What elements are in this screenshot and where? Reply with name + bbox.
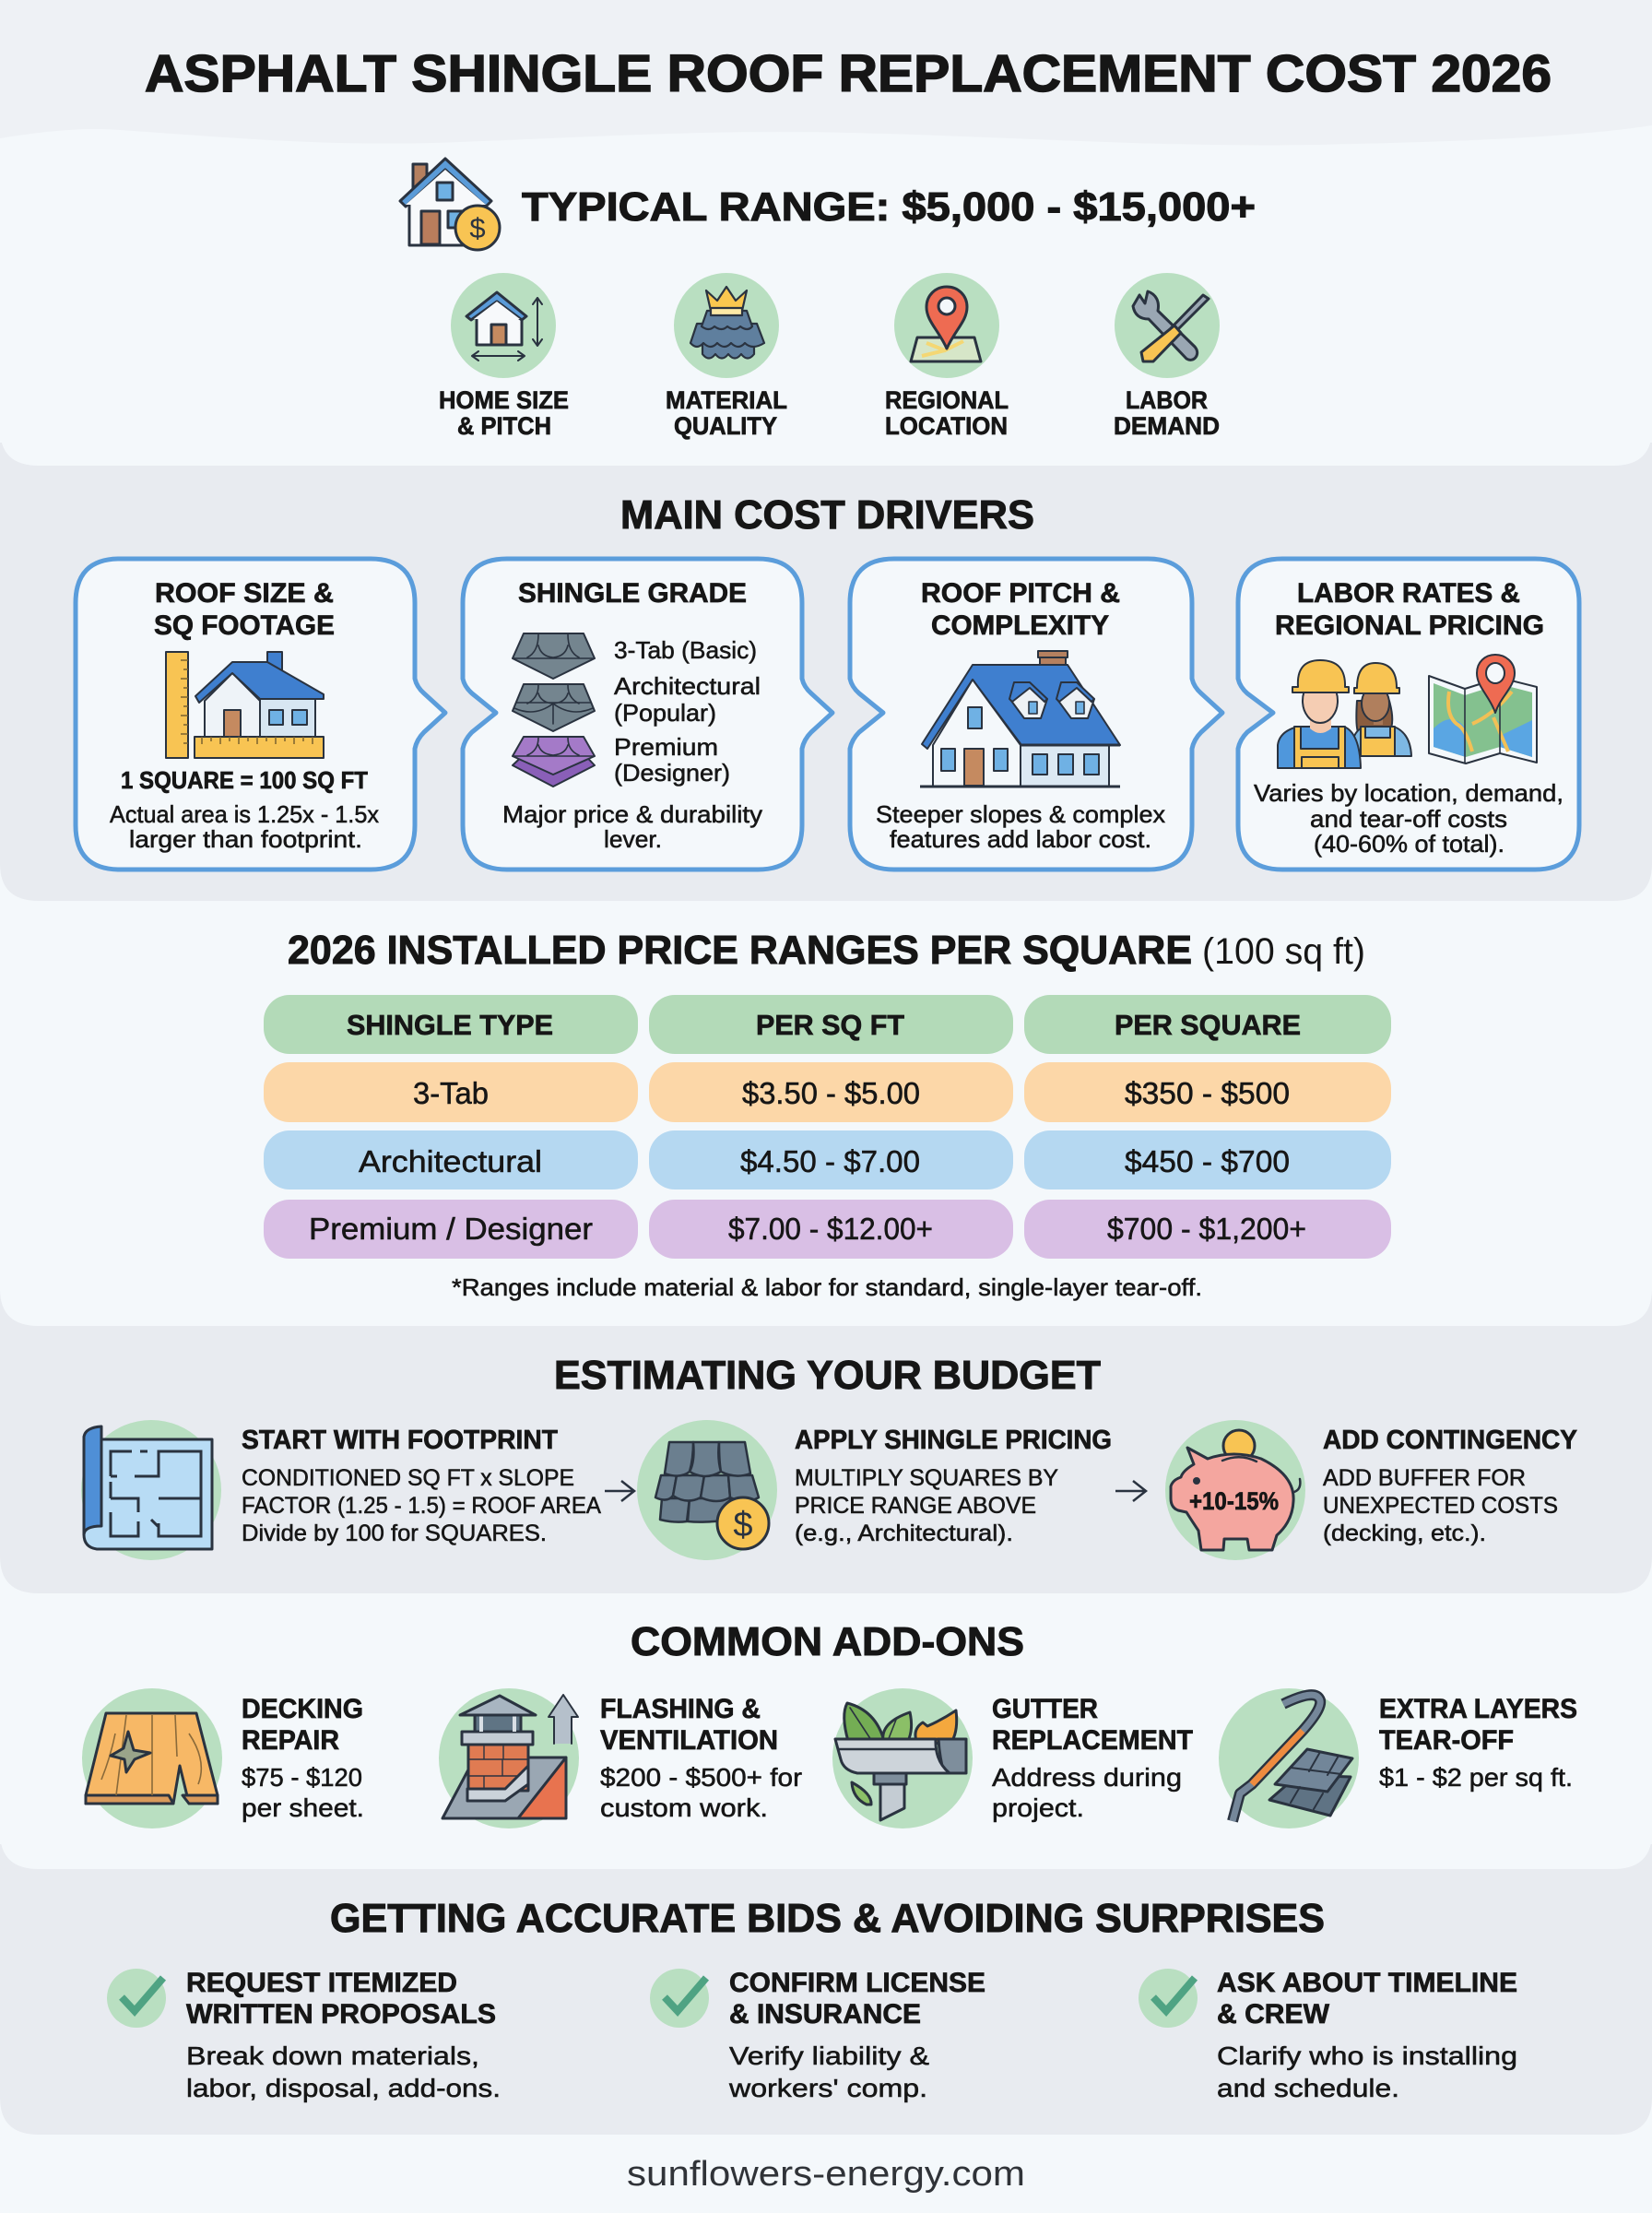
icon: blueprint	[81, 1420, 221, 1560]
factor: material quality	[666, 273, 787, 440]
description: lever.	[604, 825, 662, 853]
step: apply shingle pricing	[637, 1420, 1112, 1560]
step text: (e.g., Architectural).	[795, 1521, 1013, 1546]
icon: check	[107, 1969, 166, 2028]
label: QUALITY	[674, 412, 777, 440]
add-on text: REPLACEMENT	[992, 1725, 1193, 1756]
icon: workers	[1278, 660, 1411, 768]
icon: map pin	[911, 287, 981, 361]
description: larger than footprint.	[129, 825, 362, 853]
icon: piggy bank: +10-15%	[1189, 1487, 1279, 1515]
label: LOCATION	[885, 412, 1008, 440]
typical range text: TYPICAL RANGE: $5,000 - $15,000+	[522, 184, 1256, 230]
add-on text: $75 - $120	[242, 1763, 362, 1792]
heading: common add-ons: COMMON ADD-ONS	[631, 1619, 1024, 1664]
step text	[1323, 1426, 1577, 1546]
label	[885, 386, 1009, 440]
add-on text: $200 - $500+ for	[600, 1763, 802, 1792]
step text: CONDITIONED SQ FT x SLOPE	[242, 1465, 574, 1491]
add-on text	[992, 1694, 1193, 1822]
add-on text: project.	[992, 1793, 1084, 1822]
label	[1114, 386, 1220, 440]
add-on text: FLASHING &	[600, 1694, 761, 1724]
row: Architectural: $450 - $700	[1125, 1144, 1290, 1178]
tip text: ASK ABOUT TIMELINE	[1217, 1968, 1517, 1998]
icon: shingles with coin	[637, 1420, 777, 1560]
description	[1254, 779, 1564, 858]
add-on text: REPAIR	[242, 1725, 339, 1756]
tip text: Verify liability &	[729, 2041, 929, 2070]
grade labels	[614, 636, 761, 787]
step text	[795, 1426, 1112, 1546]
table footnote: *Ranges include material & labor for standard, single-layer tear-off.	[452, 1273, 1202, 1301]
icon: gutter with leaves	[832, 1688, 973, 1828]
add-on text	[242, 1694, 364, 1822]
icon: chimney flashing	[439, 1688, 579, 1828]
grade labels: (Designer)	[614, 759, 730, 787]
row: 3-Tab: $3.50 - $5.00	[742, 1076, 920, 1110]
tip: timeline and crew	[1139, 1968, 1517, 2102]
heading: installed price ranges: (100 sq ft)	[1202, 931, 1365, 972]
footer website: sunflowers-energy.com	[627, 2155, 1025, 2194]
step text: MULTIPLY SQUARES BY	[795, 1465, 1058, 1491]
icon: wrench and screwdriver	[1133, 291, 1209, 361]
step text: ADD CONTINGENCY	[1323, 1426, 1577, 1455]
panel: labor rates and regional pricing	[1238, 559, 1579, 870]
row: Premium / Designer: $700 - $1,200+	[1107, 1212, 1306, 1246]
icon: check	[650, 1969, 709, 2028]
icon: map with pin	[1429, 655, 1537, 763]
panel: shingle grade	[463, 559, 832, 870]
tip text: WRITTEN PROPOSALS	[186, 1999, 496, 2030]
table header row: SHINGLE TYPE	[347, 1009, 553, 1041]
label	[666, 386, 787, 440]
icon: architectural shingle	[513, 684, 595, 731]
heading: ROOF SIZE &	[155, 578, 334, 609]
step text: (decking, etc.).	[1323, 1521, 1486, 1546]
tip text: and schedule.	[1217, 2074, 1399, 2102]
icon: shingles with coin: $	[733, 1506, 753, 1544]
tip text	[728, 1968, 985, 2102]
heading	[1275, 578, 1544, 641]
row: Architectural	[264, 1130, 1391, 1189]
grade labels: (Popular)	[614, 699, 716, 727]
tip text: & CREW	[1217, 1999, 1330, 2030]
add-on: extra layers tear-off	[1219, 1688, 1577, 1828]
grade labels: 3-Tab (Basic)	[614, 636, 757, 664]
description: (40-60% of total).	[1314, 830, 1504, 858]
step text: FACTOR (1.25 - 1.5) = ROOF AREA	[242, 1493, 601, 1519]
step text: START WITH FOOTPRINT	[242, 1426, 558, 1455]
add-on text: VENTILATION	[600, 1725, 778, 1756]
factor: home size and pitch	[439, 273, 569, 440]
add-on text: $1 - $2 per sq ft.	[1379, 1763, 1573, 1792]
typical range banner	[400, 159, 1256, 250]
step text: ADD BUFFER FOR	[1323, 1465, 1526, 1491]
step text	[242, 1426, 601, 1546]
table header row: PER SQUARE	[1115, 1009, 1301, 1041]
add-on text: GUTTER	[992, 1694, 1098, 1724]
icon: home size	[466, 292, 542, 361]
tip text: Break down materials,	[186, 2041, 479, 2070]
add-on text: TEAR-OFF	[1379, 1725, 1514, 1756]
factor: labor demand	[1114, 273, 1220, 440]
row: Architectural: Architectural	[359, 1144, 542, 1178]
tip text: REQUEST ITEMIZED	[186, 1968, 457, 1998]
icon: wood decking	[82, 1688, 222, 1828]
heading: main cost drivers: MAIN COST DRIVERS	[620, 492, 1034, 538]
add-on text: EXTRA LAYERS	[1379, 1694, 1577, 1724]
step: add contingency	[1165, 1420, 1577, 1560]
description: Varies by location, demand,	[1254, 779, 1564, 807]
add-on text: per sheet.	[242, 1793, 364, 1822]
heading: SHINGLE GRADE	[518, 578, 747, 609]
description	[876, 800, 1165, 853]
table header row: PER SQ FT	[756, 1009, 904, 1041]
table header row	[264, 995, 1391, 1054]
heading: COMPLEXITY	[931, 610, 1109, 641]
add-on: gutter replacement	[832, 1688, 1193, 1828]
tip text: labor, disposal, add-ons.	[186, 2074, 501, 2102]
tip text: & INSURANCE	[729, 1999, 921, 2030]
label: & PITCH	[457, 412, 551, 440]
tip: license and insurance	[650, 1968, 985, 2102]
tip text	[186, 1968, 501, 2102]
label: REGIONAL	[885, 386, 1009, 414]
description: and tear-off costs	[1310, 805, 1507, 833]
description: Actual area is 1.25x - 1.5x	[110, 800, 379, 828]
description	[502, 800, 762, 853]
row: Premium / Designer	[264, 1200, 1391, 1259]
label	[439, 386, 569, 440]
description: Major price & durability	[502, 800, 762, 828]
heading: SQ FOOTAGE	[154, 610, 335, 641]
tip text: Clarify who is installing	[1217, 2041, 1517, 2070]
add-on text	[1379, 1694, 1577, 1792]
icon: check	[1139, 1969, 1198, 2028]
panel: roof size and square footage	[76, 559, 445, 870]
heading: installed price ranges: 2026 INSTALLED PRICE RANGES PER SQUARE	[288, 928, 1192, 973]
add-on text: Address during	[992, 1763, 1182, 1792]
arrow	[1115, 1481, 1146, 1501]
label: MATERIAL	[666, 386, 787, 414]
grade labels: Architectural	[614, 672, 761, 700]
tip text: workers' comp.	[728, 2074, 927, 2102]
price table	[264, 995, 1391, 1259]
icon: 3-tab shingle	[513, 633, 595, 679]
factor: regional location	[885, 273, 1009, 440]
step text: PRICE RANGE ABOVE	[795, 1493, 1036, 1519]
tip: itemized proposals	[107, 1968, 501, 2102]
step text: UNEXPECTED COSTS	[1323, 1493, 1558, 1519]
description	[110, 800, 379, 853]
step text: APPLY SHINGLE PRICING	[795, 1426, 1112, 1455]
icon: premium shingle	[513, 737, 595, 787]
row: 3-Tab: 3-Tab	[413, 1076, 489, 1110]
panel: roof pitch and complexity	[850, 559, 1222, 870]
icon: house with rulers	[166, 652, 324, 758]
label: DEMAND	[1114, 412, 1220, 440]
tip text	[1217, 1968, 1517, 2102]
heading: accurate bids: GETTING ACCURATE BIDS & AVOIDING SURPRISES	[330, 1896, 1325, 1941]
add-on text: custom work.	[600, 1793, 768, 1822]
description: Steeper slopes & complex	[876, 800, 1165, 828]
row: Premium / Designer: $7.00 - $12.00+	[728, 1212, 933, 1246]
icon: piggy bank	[1165, 1420, 1305, 1560]
heading: LABOR RATES &	[1297, 578, 1520, 609]
icon: house with dollar coin: $	[469, 212, 486, 244]
add-on text	[600, 1694, 802, 1822]
heading	[154, 578, 335, 641]
step: start with footprint	[81, 1420, 601, 1560]
add-on: flashing and ventilation	[439, 1688, 802, 1828]
heading	[921, 578, 1120, 641]
add-on text: DECKING	[242, 1694, 363, 1724]
title: ASPHALT SHINGLE ROOF REPLACEMENT COST 2026	[145, 44, 1552, 103]
icon: complex house	[920, 651, 1120, 787]
label: HOME SIZE	[439, 386, 569, 414]
row: Architectural: $4.50 - $7.00	[740, 1144, 920, 1178]
tip text: CONFIRM LICENSE	[729, 1968, 985, 1998]
icon: pry bar and shingles	[1219, 1688, 1359, 1828]
description: features add labor cost.	[890, 825, 1151, 853]
add-on: decking repair	[82, 1688, 364, 1828]
grade labels: Premium	[614, 733, 718, 761]
heading: ROOF PITCH &	[921, 578, 1120, 609]
heading: estimating your budget: ESTIMATING YOUR BUDGET	[554, 1353, 1101, 1398]
equivalence: 1 SQUARE = 100 SQ FT	[121, 766, 368, 794]
label: LABOR	[1126, 386, 1208, 414]
row: 3-Tab: $350 - $500	[1125, 1076, 1290, 1110]
arrow	[605, 1481, 634, 1501]
heading: REGIONAL PRICING	[1275, 610, 1544, 641]
step text: Divide by 100 for SQUARES.	[242, 1521, 547, 1546]
icon: house with dollar coin	[400, 159, 500, 250]
icon: crowned shingles	[690, 287, 764, 358]
row: Premium / Designer: Premium / Designer	[309, 1212, 593, 1246]
row: 3-Tab	[264, 1062, 1391, 1122]
